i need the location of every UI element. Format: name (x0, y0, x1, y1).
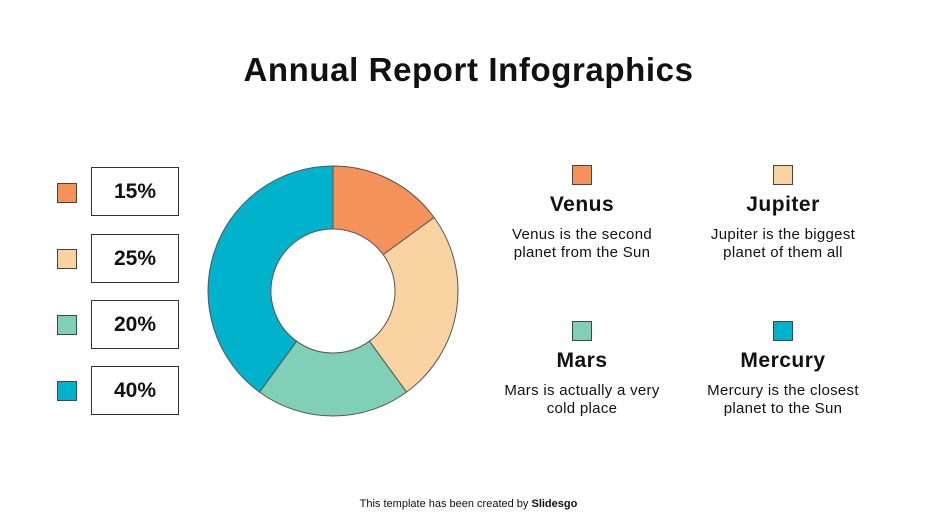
legend: 20% (114, 312, 156, 336)
legend (57, 167, 179, 415)
panel: Venus: Venus (550, 193, 614, 216)
panel: Venus (512, 165, 652, 261)
panel: Mars: Mars is actually a very cold place (504, 382, 660, 417)
legend item: 20% (57, 300, 179, 349)
legend: 25% (114, 246, 156, 270)
panel: Jupiter: Jupiter is the biggest planet of them all (711, 226, 855, 261)
title: Annual Report Infographics (243, 51, 694, 88)
legend: 40% (114, 378, 156, 402)
panel: Mercury: Mercury is the closest planet to the Sun (707, 382, 859, 417)
legend: 15% (114, 180, 156, 202)
panel: Mars: Mars (556, 349, 608, 372)
panel: Venus: Venus is the second planet from the Sun (512, 226, 652, 261)
panel: Mercury: Mercury (740, 349, 826, 372)
panel: Mercury (707, 321, 859, 417)
footer credit: This template has been created by Slidesgo (360, 498, 577, 510)
panel: Jupiter: Jupiter (746, 193, 820, 216)
panel: Jupiter (711, 165, 855, 261)
legend item: 40% (57, 366, 179, 415)
legend item: 15% (57, 167, 179, 216)
legend item: 25% (57, 234, 179, 283)
panel: Mars (504, 321, 660, 417)
